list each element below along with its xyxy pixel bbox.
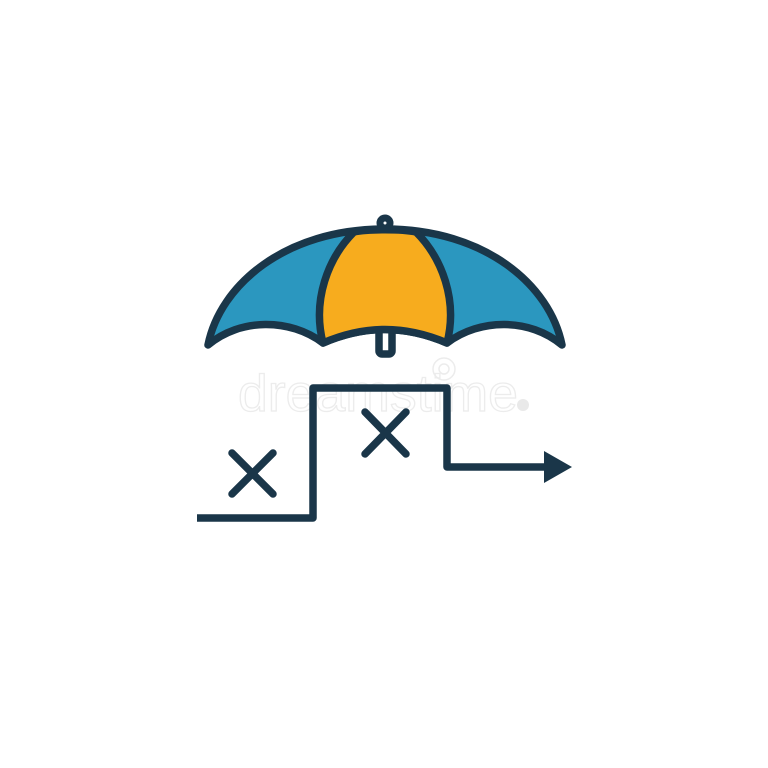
watermark: dreamstime bbox=[238, 365, 518, 423]
center x mark bbox=[365, 412, 406, 454]
umbrella bbox=[208, 218, 562, 354]
umbrella blue canopy bbox=[208, 229, 562, 345]
step line bbox=[197, 388, 548, 518]
umbrella handle bbox=[379, 328, 392, 354]
left x mark bbox=[232, 453, 273, 494]
stepped path with arrow bbox=[197, 388, 572, 518]
center orange panel bbox=[319, 230, 451, 343]
umbrella top knob bbox=[380, 218, 390, 228]
arrow head bbox=[544, 451, 572, 483]
